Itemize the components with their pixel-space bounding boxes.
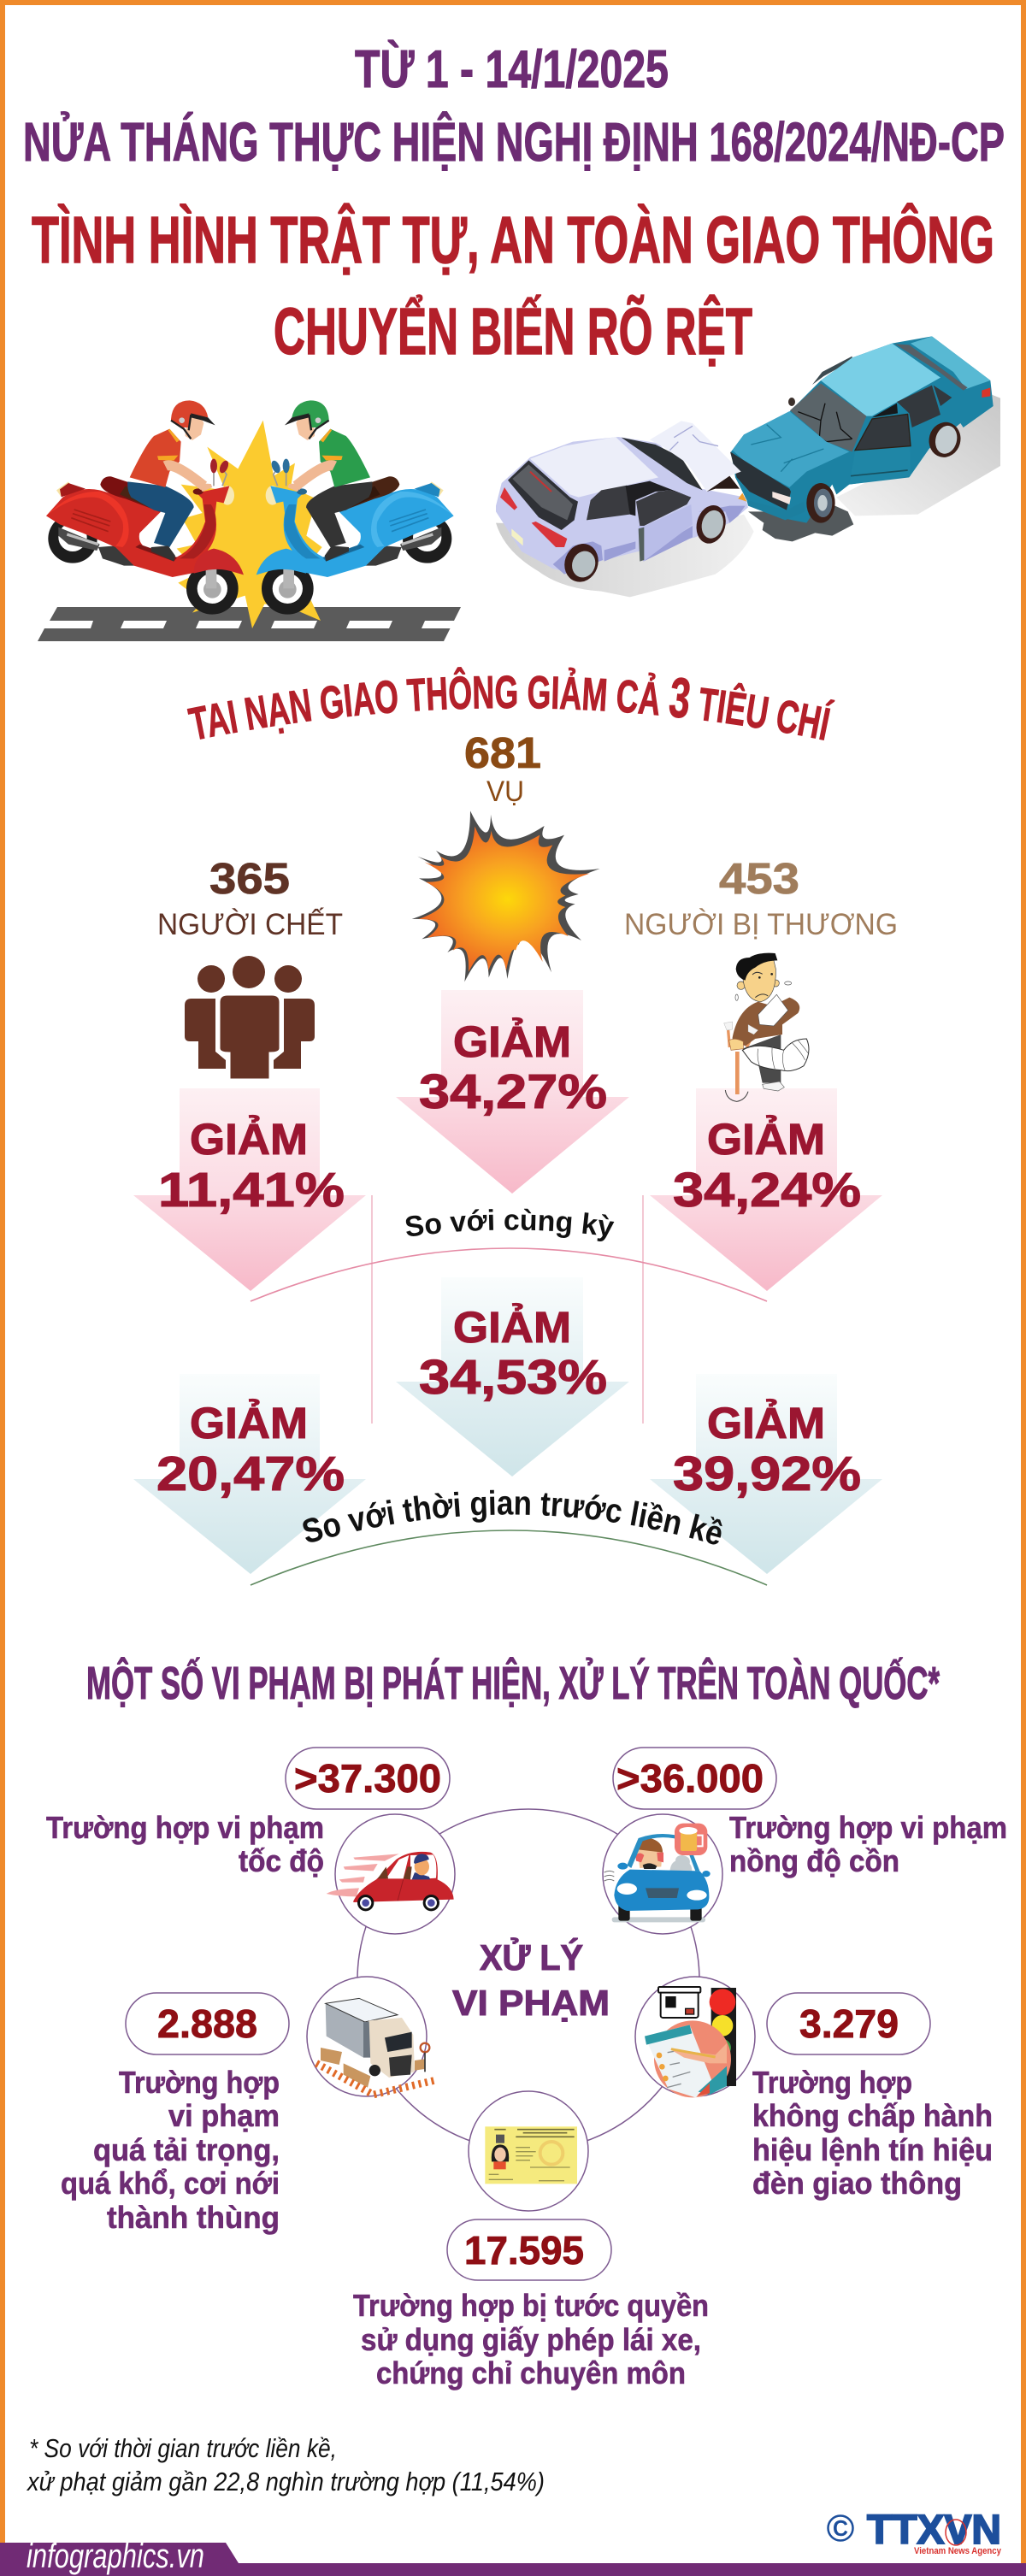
value pill: 2.888 (157, 2001, 257, 2046)
white car (496, 421, 754, 597)
arrow: injured same period: 34,24% (673, 1163, 861, 1217)
logo: TTXVN: C (833, 2515, 848, 2541)
footnote (26, 2433, 545, 2496)
stat: accidents 681: 681 (464, 728, 541, 777)
separators: pink lines (372, 1195, 643, 1424)
stat: injured 453: 453 (719, 854, 799, 903)
label text: Trường hợp (752, 2065, 912, 2100)
arrow: deaths same period: 11,41% (158, 1163, 345, 1217)
value pill (613, 1748, 776, 1809)
icon: explosion (412, 811, 600, 981)
icon: speeding car (327, 1814, 455, 1934)
label text: Trường hợp vi phạm (729, 1810, 1007, 1845)
value pill: >37.300 (294, 1756, 441, 1801)
value pill (447, 2219, 611, 2280)
illustration: car collision (496, 336, 1000, 597)
label text (61, 2065, 280, 2235)
red scooter and rider (46, 400, 244, 615)
icon: truck (307, 1977, 434, 2096)
label text: Trường hợp (119, 2065, 280, 2100)
blue scooter and rider (256, 400, 454, 615)
footnote: * So với thời gian trước liền kề, (29, 2433, 337, 2463)
stat: deaths 365 (157, 854, 343, 941)
footer bar (0, 2538, 1026, 2576)
arrow: injured previous period: 39,92% (673, 1447, 861, 1501)
stat: accidents 681: VỤ (486, 775, 524, 808)
value pill (286, 1748, 450, 1809)
violation: overload (61, 1977, 434, 2235)
road (38, 607, 461, 641)
arrow: deaths previous period: 20,47% (156, 1447, 345, 1501)
label: previous period: So với thời gian trước liền kề (303, 1489, 722, 1544)
value pill: 3.279 (799, 2001, 899, 2046)
arrow: accidents previous period: 34,53% (419, 1350, 607, 1405)
label text: tốc độ (239, 1843, 324, 1878)
icon: traffic light and ticket (635, 1977, 755, 2097)
footnote: xử phạt giảm gần 22,8 nghìn trường hợp (11,54%) (26, 2467, 545, 2496)
label text: chứng chỉ chuyên môn (376, 2355, 686, 2390)
label: same period: So với cùng kỳ (405, 1209, 614, 1241)
value pill: 17.595 (464, 2228, 584, 2272)
violation: alcohol (603, 1748, 1007, 1934)
label text: sử dụng giấy phép lái xe, (361, 2322, 701, 2357)
label text (353, 2288, 709, 2390)
arrows: compared with previous period (133, 1277, 882, 1574)
main title line 2: CHUYỂN BIẾN RÕ RỆT (274, 294, 752, 368)
violation: traffic signal (635, 1977, 993, 2201)
icon: people group (185, 956, 315, 1080)
arrow: injured previous period (650, 1374, 882, 1574)
hub: central ring (357, 1809, 699, 2151)
arrow: injured same period (650, 1088, 882, 1291)
arrow: accidents same period: 34,27% (419, 1064, 607, 1119)
icon: injured man (724, 953, 809, 1101)
label text: quá tải trọng, (93, 2132, 280, 2167)
stat: deaths 365: 365 (209, 854, 290, 903)
logo: TTXVN: TTXVN (867, 2508, 1001, 2553)
icon: driving licence (469, 2091, 588, 2211)
blue car (730, 336, 1000, 541)
arrow: deaths same period: GIẢM (190, 1114, 308, 1164)
label text (46, 1810, 324, 1878)
label text: Trường hợp vi phạm (46, 1810, 324, 1845)
label text: không chấp hành (752, 2098, 993, 2133)
title line: date: TỪ 1 - 14/1/2025 (355, 40, 669, 99)
stat: injured 453 (624, 854, 898, 941)
arrow: accidents previous period (396, 1277, 629, 1477)
violation: speeding (46, 1748, 455, 1934)
header titles (23, 40, 1005, 368)
arrow: injured previous period: GIẢM (707, 1398, 825, 1447)
label text: thành thùng (107, 2200, 280, 2235)
hub: central ring: XỬ LÝ (480, 1936, 583, 1978)
value pill (767, 1993, 930, 2054)
value pill (126, 1993, 289, 2054)
stat: accidents 681 (464, 728, 541, 808)
label text: Trường hợp bị tước quyền (353, 2288, 709, 2323)
arrow: accidents same period: GIẢM (453, 1017, 571, 1066)
arrow: accidents previous period: GIẢM (453, 1302, 571, 1352)
label text (729, 1810, 1007, 1878)
stat: injured 453: NGƯỜI BỊ THƯƠNG (624, 908, 898, 941)
arrows: compared with same period (133, 990, 882, 1291)
stat: deaths 365: NGƯỜI CHẾT (157, 907, 343, 941)
arc: same period (251, 1248, 767, 1301)
section heading: accidents: TAI NẠN GIAO THÔNG GIẢM CẢ 3 TIÊU CHÍ (186, 667, 834, 740)
icon: drunk driver (603, 1814, 722, 1934)
label text: vi phạm (168, 2098, 280, 2133)
label text: đèn giao thông (752, 2166, 962, 2201)
label text: nồng độ cồn (729, 1843, 899, 1878)
arrow: accidents same period (396, 990, 629, 1194)
label text: hiệu lệnh tín hiệu (752, 2132, 993, 2167)
logo: TTXVN: Vietnam News Agency (914, 2546, 1002, 2556)
arrow: deaths previous period: GIẢM (190, 1398, 308, 1447)
violation: licence revoked (353, 2091, 709, 2390)
arrow: deaths previous period (133, 1374, 366, 1574)
illustration: motorbike collision (38, 400, 461, 641)
arrow: injured same period: GIẢM (707, 1114, 825, 1164)
value pill: >36.000 (616, 1756, 764, 1801)
collision star (177, 421, 322, 628)
label text (752, 2065, 993, 2201)
footer bar: infographics.vn (27, 2538, 204, 2575)
hub: central ring: VI PHẠM (452, 1983, 610, 2023)
label text: quá khổ, cơi nới (61, 2166, 280, 2201)
arc: previous period (251, 1530, 767, 1585)
arrow: deaths same period (133, 1088, 366, 1291)
